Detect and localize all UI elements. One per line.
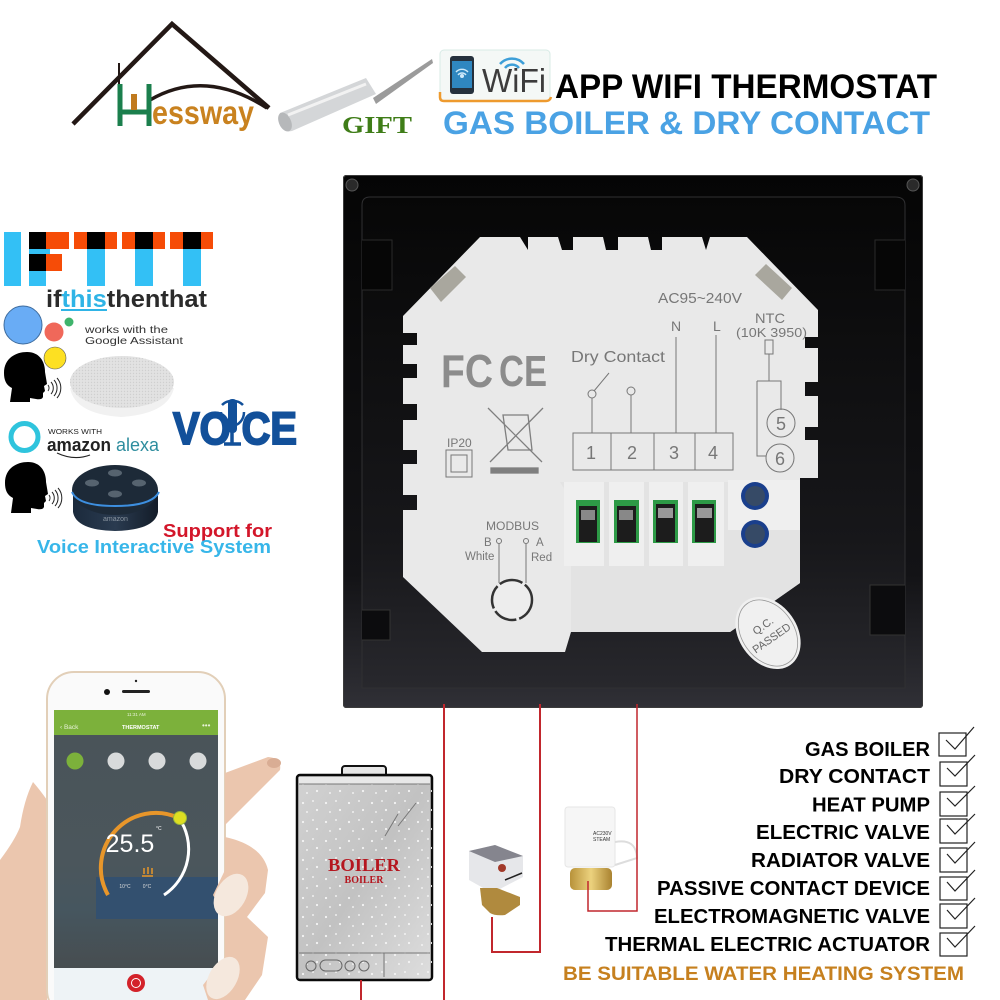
text: works with Amazon Alexa: amazon [47, 435, 111, 455]
modbus labels: White [465, 551, 494, 563]
voltage labels: NTC [755, 310, 785, 326]
subtitle: Gas Boiler and Dry Contact: GAS BOILER & DRY CONTACT [443, 105, 930, 141]
app header: ••• [202, 721, 211, 730]
text: works with Amazon Alexa: alexa [116, 435, 160, 455]
list: compatible devices: PASSIVE CONTACT DEVICE [657, 878, 930, 900]
terminal numbers: 2 [627, 443, 637, 463]
icon: WiFi badge [440, 50, 551, 101]
power button [127, 974, 145, 992]
IP20 mark: IP20 [447, 436, 472, 450]
modbus connector [492, 538, 532, 620]
text: ifthisthenthat: ifthisthenthat [46, 286, 207, 313]
hand: right fingers [203, 757, 280, 1000]
module body [403, 237, 818, 652]
temperature dial [101, 812, 189, 895]
sticker: QC passed: Q.C. [751, 615, 776, 638]
modbus labels: MODBUS [486, 521, 539, 533]
text: works with Amazon Alexa [47, 429, 160, 458]
terminal numbers: 3 [669, 443, 679, 463]
label: GIFT: GIFT [342, 113, 412, 139]
temperature dial: 25.5 [106, 830, 154, 858]
terminal slots [564, 480, 800, 566]
sticker: QC passed: PASSED [751, 621, 793, 656]
icon: speaking head 2 [5, 462, 62, 513]
module vents [430, 266, 466, 302]
icon: Google Assistant dots [4, 306, 74, 369]
list: compatible devices: DRY CONTACT [779, 766, 930, 788]
wiring diagram [573, 335, 795, 472]
text: Support for: Support for [163, 521, 272, 541]
terminal numbers: 5 [776, 414, 786, 434]
modbus labels: A [536, 537, 544, 549]
app header: ‹ Back [60, 724, 79, 731]
modbus labels: Red [531, 552, 552, 564]
wiring: red connection lines [361, 704, 637, 1000]
blue screws [741, 482, 769, 548]
list: compatible devices: GAS BOILER [805, 739, 931, 761]
list: compatible devices: RADIATOR VALVE [751, 850, 930, 872]
voltage labels: AC95~240V [658, 291, 742, 307]
hand: left thumb side [0, 782, 47, 1000]
app header: 11:31 AM [127, 712, 146, 717]
certification marks: CE [499, 347, 547, 396]
icon: screwdriver gift [275, 59, 433, 134]
illustration: thermal actuator: AC230V [593, 831, 612, 837]
illustration: thermal actuator [565, 807, 637, 890]
voltage labels: N [671, 318, 681, 334]
terminal numbers: 1 [586, 443, 596, 463]
text: works with Google Assistant [84, 324, 183, 347]
text: Voice Interactive System: Voice Interactive System [37, 536, 271, 557]
temperature dial: 10°C [119, 884, 131, 890]
illustration: motorized valve [469, 845, 523, 915]
certification marks [441, 345, 547, 397]
dry contact label: Dry Contact [571, 349, 666, 366]
terminal numbers [586, 414, 786, 469]
IP20 mark [446, 436, 472, 477]
icon: Amazon Alexa ring [11, 424, 38, 450]
app header: THERMOSTAT [122, 725, 160, 731]
panel: IFTTT logo [4, 232, 213, 286]
panel: thermostat back housing [343, 175, 923, 708]
icon: WiFi badge: WiFi [482, 62, 546, 99]
logo: Hessway [73, 24, 269, 131]
hand holding phone [0, 672, 281, 1000]
list: compatible devices: HEAT PUMP [812, 794, 930, 816]
app screen [54, 735, 218, 1000]
certification marks: FC [441, 345, 493, 397]
illustration: thermal actuator: STEAM [593, 837, 610, 843]
footer text: suitable system: BE SUITABLE WATER HEATING SYSTEM [563, 964, 964, 985]
phone body [47, 672, 225, 1000]
fingernails [199, 758, 281, 1000]
mode icons [66, 752, 206, 770]
icon: Amazon Echo Dot [72, 465, 159, 531]
app header [54, 710, 218, 735]
illustration: boiler: BOILER [328, 855, 400, 875]
illustration: boiler [297, 766, 432, 980]
icon: speaking head 1 [4, 352, 61, 402]
temperature dial: °C [156, 826, 162, 832]
text: works with Google Assistant: works with the [84, 324, 168, 336]
illustration: boiler: BOILER [345, 875, 384, 886]
icon: Google Home Mini speaker [70, 356, 174, 417]
terminal numbers: 4 [708, 443, 718, 463]
sticker: QC passed [722, 584, 814, 682]
list: compatible devices: THERMAL ELECTRIC ACTUATOR [605, 934, 931, 956]
icon: Amazon Echo Dot: amazon [103, 516, 128, 523]
text: works with Google Assistant: Google Assistant [85, 335, 183, 347]
checkboxes [939, 727, 975, 956]
voltage labels: (10K 3950) [736, 325, 807, 340]
list: compatible devices: ELECTROMAGNETIC VALVE [654, 906, 930, 928]
temperature dial: 0°C [143, 884, 152, 890]
wheelie bin symbol [488, 408, 543, 473]
list: compatible devices: ELECTRIC VALVE [756, 822, 930, 844]
terminal numbers: 6 [775, 449, 785, 469]
text: Voice logo: VO CE [173, 403, 297, 454]
voltage labels [658, 291, 807, 340]
list: compatible devices [605, 739, 931, 956]
voltage labels: L [713, 318, 721, 334]
text: works with Amazon Alexa: WORKS WITH [48, 429, 102, 436]
modbus labels [465, 521, 552, 564]
panel: white wiring module [403, 237, 818, 652]
logo: Hessway: essway [152, 94, 255, 131]
modbus labels: B [484, 537, 492, 549]
title: App WiFi Thermostat: APP WIFI THERMOSTAT [555, 68, 937, 106]
